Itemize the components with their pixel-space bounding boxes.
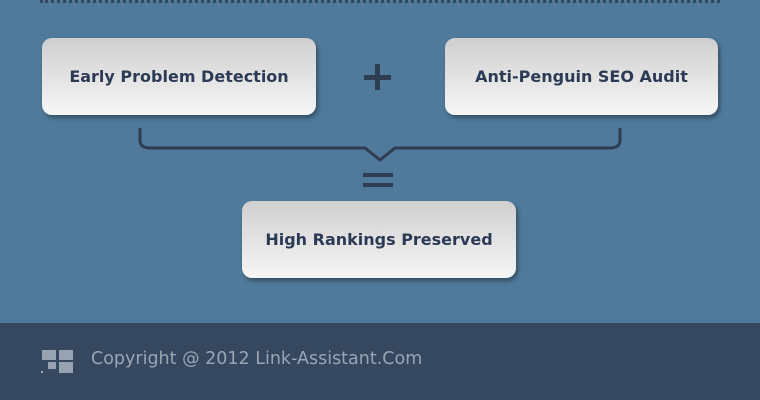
plus sign: [364, 64, 391, 90]
dotted top line: [40, 0, 720, 3]
copyright text: Copyright @ 2012 Link-Assistant.Com: [91, 349, 422, 369]
equals sign: [363, 173, 393, 187]
footer: [0, 323, 760, 400]
box: early problem detection: [42, 38, 316, 115]
box: early problem detection: Early Problem Detection: [69, 67, 289, 86]
bracket connector: [138, 128, 622, 162]
box: high rankings preserved: [242, 201, 516, 278]
box: anti-penguin seo audit: [445, 38, 718, 115]
box: anti-penguin seo audit: Anti-Penguin SEO Audit: [475, 67, 688, 86]
box: high rankings preserved: High Rankings Preserved: [265, 230, 493, 249]
icon: logo: [41, 350, 73, 373]
